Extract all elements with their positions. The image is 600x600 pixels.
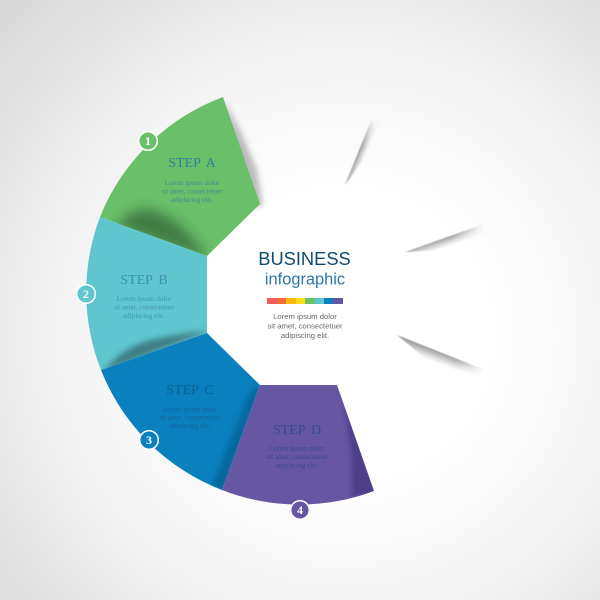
step C heading: STEP C	[166, 383, 214, 398]
step C body: Lorem ipsum dolor	[163, 406, 218, 414]
slit shadow: top	[345, 121, 374, 184]
shadow on blue	[212, 383, 262, 492]
shadow on green	[116, 209, 209, 260]
step A body: sit amet, consectetuer	[161, 188, 223, 196]
step B body: sit amet, consectetuer	[113, 304, 175, 312]
title: business: BUSINESS	[258, 248, 351, 269]
step D body: sit amet, consectetuer	[266, 453, 328, 461]
step B body: Lorem ipsum dolor	[117, 295, 172, 303]
step B heading: STEP B	[120, 273, 168, 288]
step A heading: STEP A	[168, 156, 217, 171]
subtitle: infographic: infographic	[265, 270, 345, 288]
panel: step A	[100, 97, 260, 260]
center description: sit amet, consectetuer	[267, 322, 343, 330]
badge 2	[77, 285, 95, 303]
step C body: adipiscing elit.	[169, 422, 211, 430]
step D body: Lorem ipsum dolor	[270, 444, 325, 452]
center description: adipiscing elit.	[281, 331, 329, 340]
step D heading: STEP D	[273, 423, 321, 438]
badge 4	[291, 501, 309, 519]
shadow on purple	[344, 406, 374, 498]
badge 1	[139, 132, 157, 150]
badge 2: 2	[83, 287, 89, 301]
badge 3: 3	[146, 433, 152, 447]
panel: step D	[222, 385, 376, 505]
shadow on teal	[104, 331, 209, 372]
badge 4: 4	[297, 503, 303, 517]
rainbow bar	[267, 298, 343, 304]
step C body: sit amet, consectetuer	[159, 414, 221, 422]
slit shadow: right lower	[397, 335, 480, 372]
step A body: adipiscing elit.	[171, 196, 213, 204]
shadow of green segment	[224, 100, 263, 206]
panel: step B	[86, 217, 209, 372]
slit shadow: right upper	[406, 226, 480, 252]
step B body: adipiscing elit.	[123, 312, 165, 320]
badge 3	[140, 431, 158, 449]
center description: Lorem ipsum dolor	[273, 312, 337, 321]
step A body: Lorem ipsum dolor	[165, 179, 220, 187]
panel: step C	[101, 333, 262, 492]
step D body: adipiscing elit.	[276, 462, 318, 470]
badge 1: 1	[145, 134, 151, 148]
